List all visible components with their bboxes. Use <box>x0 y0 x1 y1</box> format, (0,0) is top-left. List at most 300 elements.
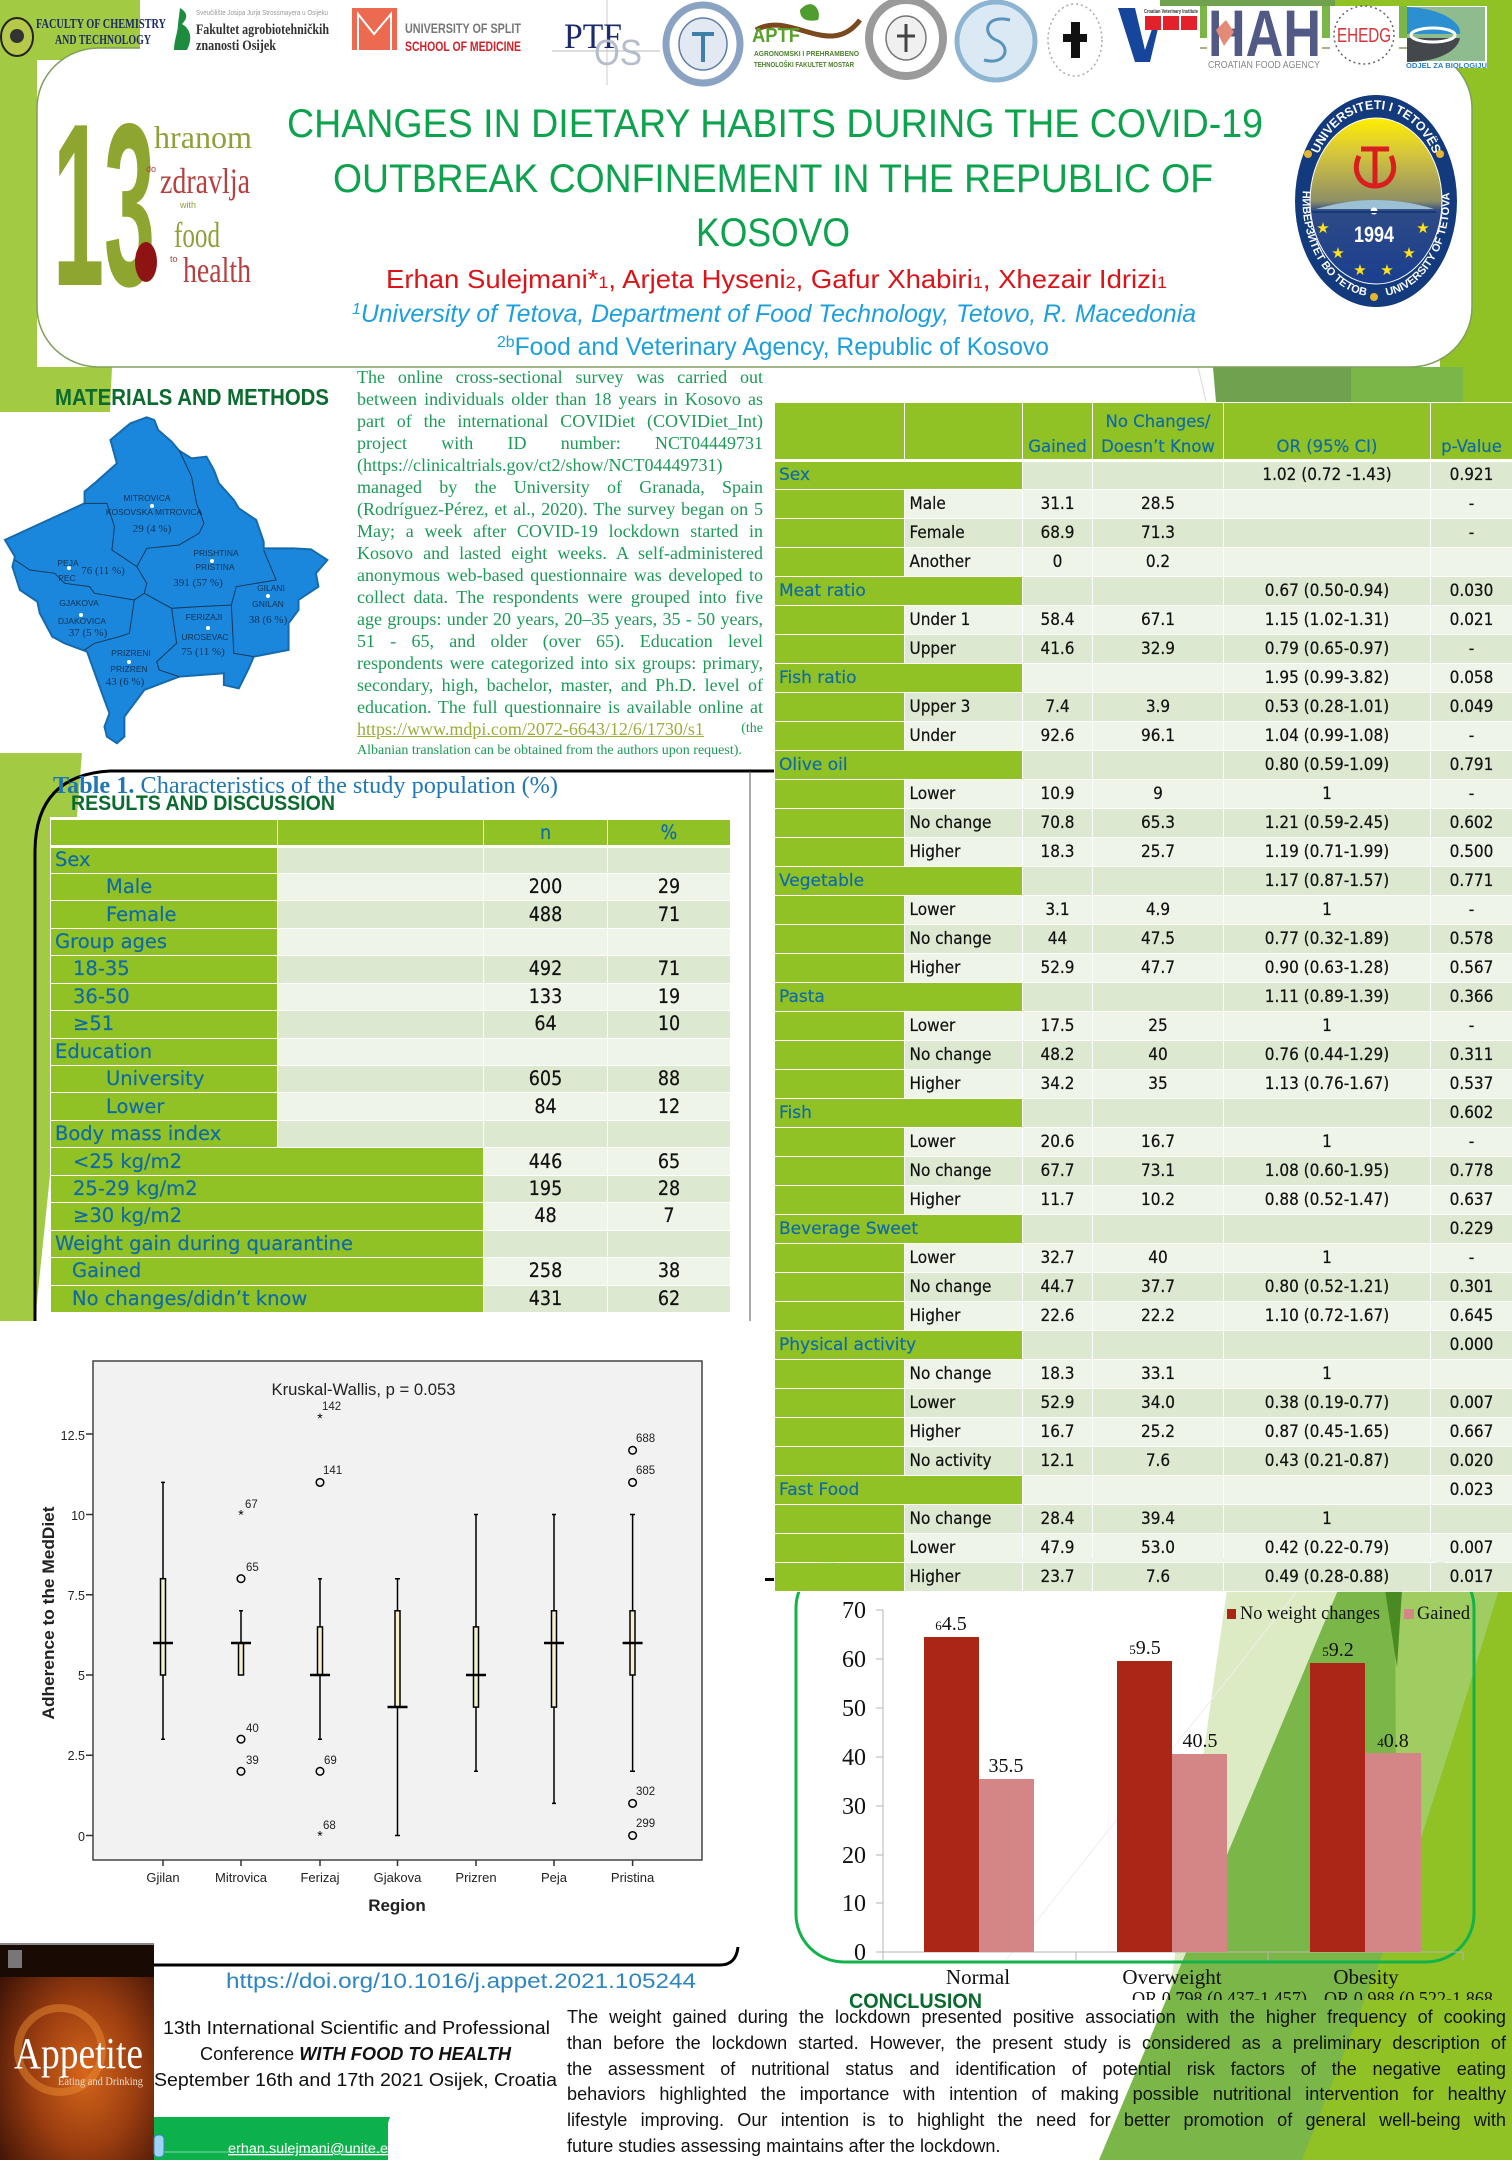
table 1: characteristics of the study population: 38 <box>658 1259 680 1282</box>
chart legend: No weight changes <box>1240 1603 1380 1624</box>
table 1: characteristics of the study population: ≥51 <box>73 1012 114 1035</box>
table 1 caption: Table 1. Characteristics of the study population (%) <box>53 773 558 799</box>
table 2: dietary habits by weight change: 18.3 <box>1040 1364 1075 1384</box>
table 2: dietary habits by weight change: 12.1 <box>1040 1451 1075 1471</box>
table 1: characteristics of the study population: 18-35 <box>73 957 130 980</box>
table 1: characteristics of the study population: 28 <box>658 1177 680 1200</box>
table 1: characteristics of the study population: 10 <box>658 1012 680 1035</box>
table 2: dietary habits by weight change: 23.7 <box>1040 1567 1075 1587</box>
logo: APTF: TEHNOLOŠKI FAKULTET MOSTAR <box>754 60 854 69</box>
title: OUTBREAK CONFINEMENT IN THE REPUBLIC OF <box>333 157 1213 201</box>
table 2: dietary habits by weight change: Higher <box>910 958 960 978</box>
logo: croatian veterinary institute: Croatian Veterinary Institute <box>1144 9 1198 15</box>
table 1: characteristics of the study population: Gained <box>72 1259 141 1282</box>
table 2: dietary habits by weight change: 73.1 <box>1141 1161 1175 1181</box>
table 2: dietary habits by weight change: Meat ratio <box>779 581 866 601</box>
box plot: adherence to the MedDiet by region: 299 <box>636 1818 655 1830</box>
table 2: dietary habits by weight change: - <box>1469 900 1474 920</box>
box plot: adherence to the MedDiet by region: Prizren <box>455 1870 497 1885</box>
table 2: dietary habits by weight change: Higher <box>910 1306 960 1326</box>
table 2: dietary habits by weight change: 67.7 <box>1040 1161 1075 1181</box>
table 2: dietary habits by weight change: 96.1 <box>1141 726 1175 746</box>
table 2: dietary habits by weight change: 1 <box>1322 1509 1332 1529</box>
table 2: dietary habits by weight change: 0.007 <box>1450 1538 1493 1558</box>
table 2: dietary habits by weight change: 52.9 <box>1040 958 1075 978</box>
table 1: characteristics of the study population: 19 <box>658 985 680 1008</box>
table 1: characteristics of the study population <box>51 820 730 1312</box>
table 2: dietary habits by weight change: Higher <box>910 1567 960 1587</box>
table 2: dietary habits by weight change: 0.500 <box>1450 842 1493 862</box>
table 2: dietary habits by weight change: 20.6 <box>1040 1132 1075 1152</box>
table 2: dietary habits by weight change: 47.5 <box>1141 929 1175 949</box>
bar chart: weight changes by BMI class: Overweight <box>1122 1965 1222 1989</box>
table 2: dietary habits by weight change: 58.4 <box>1040 610 1075 630</box>
header panel <box>37 0 1472 367</box>
table 2: dietary habits by weight change: - <box>1469 1248 1474 1268</box>
box plot: adherence to the MedDiet by region: * <box>238 1506 244 1522</box>
table 2: dietary habits by weight change: 39.4 <box>1141 1509 1175 1529</box>
bar chart: weight changes by BMI class: 40 <box>842 1745 866 1771</box>
conclusion text: behaviors highlighted the importance with intention of making possible nutritional intervention for healthy <box>567 2084 1506 2104</box>
table 2: dietary habits by weight change: 1.15 (1.02-1.31) <box>1265 610 1389 630</box>
logo: croatian food agency: CROATIAN FOOD AGENCY <box>1208 60 1320 71</box>
bar chart: weight changes by BMI class: 59.2 <box>1322 1639 1354 1661</box>
table 2: dietary habits by weight change: 0.43 (0.21-0.87) <box>1265 1451 1389 1471</box>
table 2: dietary habits by weight change: 7.6 <box>1146 1451 1170 1471</box>
table 2: dietary habits by weight change: 52.9 <box>1040 1393 1075 1413</box>
box plot: adherence to the MedDiet by region: Kruskal-Wallis, p = 0.053 <box>272 1380 456 1399</box>
box plot: adherence to the MedDiet by region: * <box>317 1828 323 1844</box>
table 2: dietary habits by weight change: 67.1 <box>1141 610 1175 630</box>
table 2: dietary habits by weight change: 1 <box>1322 1248 1332 1268</box>
table 2: dietary habits by weight change: 0.79 (0.65-0.97) <box>1265 639 1389 659</box>
logo: APTF <box>752 4 860 69</box>
materials and methods text: managed by the University of Granada, Spain <box>357 477 763 497</box>
table 2: dietary habits by weight change: 7.4 <box>1045 697 1070 717</box>
table 1: characteristics of the study population: 258 <box>529 1259 562 1282</box>
table 2: dietary habits by weight change: 31.1 <box>1040 494 1075 514</box>
map of Kosovo with regions: 29 (4 %) <box>133 523 172 535</box>
table 2: dietary habits by weight change: No change <box>910 1161 991 1181</box>
table 2: dietary habits by weight change: 32.9 <box>1141 639 1175 659</box>
materials and methods text: secondary, high, bachelor, master, and Ph.D. level of <box>357 675 763 695</box>
box plot: adherence to the MedDiet by region: Gjakova <box>374 1870 422 1885</box>
logo: croatian veterinary institute <box>1118 8 1198 62</box>
logo: university of tetova crest: UNIVERSITY OF TETOVA <box>1385 192 1450 296</box>
map of Kosovo with regions: GNILAN <box>252 599 284 609</box>
table 1: characteristics of the study population: 71 <box>658 957 680 980</box>
logo: university of tetova crest <box>1295 95 1457 307</box>
table 2: dietary habits by weight change: 35 <box>1148 1074 1168 1094</box>
affiliation 1: University of Tetova, Department of Food Technology, Tetovo, R. Macedonia <box>361 300 1196 328</box>
table 2: dietary habits by weight change: - <box>1469 784 1474 804</box>
logo: odjel za biologiju <box>1406 6 1487 70</box>
logo: fakultet agrobiotehnickih: Fakultet agrobiotehničkih <box>196 22 330 38</box>
table 2: dietary habits by weight change: 17.5 <box>1040 1016 1075 1036</box>
table 2: dietary habits by weight change: 0.80 (0.52-1.21) <box>1265 1277 1389 1297</box>
materials and methods text: May; a week after COVID-19 lockdown started in <box>357 521 763 541</box>
table 2: dietary habits by weight change: 37.7 <box>1141 1277 1175 1297</box>
table 1: characteristics of the study population: Male <box>106 875 152 898</box>
affiliation 2: 2b <box>497 334 515 351</box>
conclusion text: future studies assessing maintains after the lockdown. <box>567 2136 1000 2156</box>
table 2: dietary habits by weight change: 25.7 <box>1141 842 1175 862</box>
box plot: adherence to the MedDiet by region: 67 <box>245 1499 258 1511</box>
table 2: dietary habits by weight change: 0.645 <box>1450 1306 1493 1326</box>
table 2: dietary habits by weight change: Higher <box>910 1190 960 1210</box>
table 2: dietary habits by weight change: - <box>1469 639 1474 659</box>
table 2: dietary habits by weight change: 1 <box>1322 784 1332 804</box>
box plot: adherence to the MedDiet by region: 10 <box>71 1509 85 1523</box>
table 2: dietary habits by weight change: Under <box>910 726 956 746</box>
logo: 13 hranom do zdravlja with food to health: to <box>170 254 178 264</box>
table 2: dietary habits by weight change: Upper 3 <box>910 697 970 717</box>
logo: university of tetova crest: ★ <box>1380 262 1394 279</box>
materials and methods text: (the <box>741 721 763 736</box>
logo: university of split: UNIVERSITY OF SPLIT <box>405 20 521 36</box>
table 2: dietary habits by weight change: 22.2 <box>1141 1306 1175 1326</box>
table 2: dietary habits by weight change: 0.791 <box>1450 755 1493 775</box>
bar chart: weight changes by BMI class: 0 <box>854 1940 866 1966</box>
bar chart: weight changes by BMI class: 20 <box>842 1843 866 1869</box>
logo: university of tetova crest: ★ <box>1416 220 1430 237</box>
table 2: dietary habits by weight change: 1 <box>1322 1132 1332 1152</box>
logo: university of tetova crest: ★ <box>1353 262 1367 279</box>
bar chart: weight changes by BMI class: 40.8 <box>1377 1730 1409 1752</box>
box plot: adherence to the MedDiet by region: Ferizaj <box>300 1870 340 1885</box>
materials and methods text: between individuals older than 18 years in Kosovo as <box>357 389 763 409</box>
table 2: dietary habits by weight change: 0 <box>1053 552 1062 572</box>
logo: faculty of chemistry and technology: FACULTY OF CHEMISTRY <box>36 17 166 32</box>
table 1: characteristics of the study population: 488 <box>529 903 562 926</box>
journal cover: Appetite: Appetite <box>14 2029 143 2078</box>
logo: 13 hranom do zdravlja with food to health: food <box>174 215 220 255</box>
table 1: characteristics of the study population: 492 <box>529 957 562 980</box>
table 2: dietary habits by weight change: 1.02 (0.72 -1.43) <box>1262 465 1392 485</box>
table 2: dietary habits by weight change: 1 <box>1322 1364 1332 1384</box>
table 2: dietary habits by weight change: 3.9 <box>1146 697 1170 717</box>
table 2: dietary habits by weight change: No change <box>910 929 991 949</box>
table 1: characteristics of the study population: Group ages <box>55 930 167 953</box>
table 2: dietary habits by weight change: Higher <box>910 1074 960 1094</box>
table 2: dietary habits by weight change: 70.8 <box>1040 813 1075 833</box>
table 2: dietary habits by weight change: 28.4 <box>1040 1509 1075 1529</box>
box plot: adherence to the MedDiet by region: 68 <box>323 1820 336 1832</box>
box plot: adherence to the MedDiet by region: 685 <box>636 1465 655 1477</box>
table 2: dietary habits by weight change: 0.578 <box>1450 929 1493 949</box>
bar chart: weight changes by BMI class: 59.5 <box>1129 1637 1161 1659</box>
table 1: characteristics of the study population: Female <box>106 903 177 926</box>
table 2: dietary habits by weight change: 0.77 (0.32-1.89) <box>1265 929 1389 949</box>
mark beside right table <box>765 1578 774 1581</box>
bar chart: weight changes by BMI class: 10 <box>842 1891 866 1917</box>
map of Kosovo with regions: PEJA <box>57 558 79 568</box>
table 2: dietary habits by weight change: Pasta <box>779 987 825 1007</box>
logo: fakultet agrobiotehnickih <box>174 8 330 54</box>
table 2: dietary habits by weight change: Fast Food <box>779 1480 859 1500</box>
materials and methods text: The online cross-sectional survey was carried out <box>357 367 763 387</box>
table 2: dietary habits by weight change: - <box>1469 523 1474 543</box>
conclusion text: than before the lockdown started. However, the present study is considered as a preliminary description of <box>567 2033 1506 2053</box>
table 1: characteristics of the study population: Lower <box>106 1095 164 1118</box>
logo: PTF Osijek: OS <box>594 32 642 73</box>
table 2: dietary habits by weight change: 0.020 <box>1450 1451 1493 1471</box>
table 1: characteristics of the study population: University <box>106 1067 204 1090</box>
table 2: dietary habits by weight change: 0.602 <box>1450 813 1493 833</box>
bar chart: weight changes by BMI class: 64.5 <box>935 1613 967 1635</box>
bar chart: weight changes by BMI class: 50 <box>842 1696 866 1722</box>
bar chart: weight changes by BMI class: 35.5 <box>988 1755 1024 1777</box>
box plot: adherence to the MedDiet by region: 142 <box>322 1401 341 1413</box>
bar chart: weight changes by BMI class: OR 0.798 (0.437-1.457) <box>1132 1988 1307 2010</box>
map of Kosovo with regions: KOSOVSKA MITROVICA <box>106 507 203 517</box>
table 2: dietary habits by weight change: 0.017 <box>1450 1567 1493 1587</box>
table 1: characteristics of the study population: 62 <box>658 1287 680 1310</box>
table 2: dietary habits by weight change: - <box>1469 1132 1474 1152</box>
materials and methods text: (https://clinicaltrials.gov/ct2/show/NCT04449731) <box>357 455 722 475</box>
table 2: dietary habits by weight change: 0.87 (0.45-1.65) <box>1265 1422 1389 1442</box>
logo: APTF: AGRONOMSKI I PREHRAMBENO <box>754 51 860 58</box>
box plot: adherence to the MedDiet by region: 0 <box>78 1830 85 1844</box>
table 1: characteristics of the study population: 84 <box>534 1095 557 1118</box>
table 2: dietary habits by weight change: 0.537 <box>1450 1074 1493 1094</box>
table 2: dietary habits by weight change: 16.7 <box>1040 1422 1075 1442</box>
box plot: adherence to the MedDiet by region: Adherence to the MedDiet <box>39 1506 58 1720</box>
table 2: dietary habits by weight change: No Changes/ <box>1105 412 1210 430</box>
table 2: dietary habits by weight change: 25.2 <box>1141 1422 1175 1442</box>
table 2: dietary habits by weight change: No change <box>910 1509 991 1529</box>
table 2: dietary habits by weight change: 11.7 <box>1040 1190 1075 1210</box>
materials and methods text <box>357 367 763 758</box>
box plot: adherence to the MedDiet by region <box>39 1361 702 1915</box>
table 2: dietary habits by weight change: 0.000 <box>1450 1335 1493 1355</box>
table 2: dietary habits by weight change: 25 <box>1148 1016 1168 1036</box>
table 1: characteristics of the study population: No changes/didn’t know <box>72 1287 307 1310</box>
journal cover: Appetite <box>0 1943 154 2160</box>
logo: black cross seal <box>1048 4 1102 76</box>
map of Kosovo with regions: GJAKOVA <box>59 598 99 608</box>
table 2: dietary habits by weight change: 10.9 <box>1040 784 1075 804</box>
logo: university of split: SCHOOL OF MEDICINE <box>405 38 521 54</box>
box plot: adherence to the MedDiet by region: Peja <box>541 1870 568 1885</box>
box plot: adherence to the MedDiet by region: * <box>317 1410 323 1426</box>
chart legend: Gained <box>1417 1603 1470 1624</box>
table 1: characteristics of the study population: 431 <box>529 1287 562 1310</box>
materials and methods text: project with ID number: NCT04449731 <box>357 433 763 453</box>
table 2: dietary habits by weight change: Higher <box>910 1422 960 1442</box>
logo: 13 hranom do zdravlja with food to health: health <box>183 250 251 290</box>
logo: 13 hranom do zdravlja with food to health: hranom <box>154 119 252 155</box>
bar chart: weight changes by BMI class: OR 0.988 (0.522-1.868 <box>1324 1988 1493 2010</box>
box plot: adherence to the MedDiet by region: Pristina <box>611 1870 655 1885</box>
table 2: dietary habits by weight change: 3.1 <box>1045 900 1070 920</box>
table 2: dietary habits by weight change: 0.53 (0.28-1.01) <box>1265 697 1389 717</box>
box plot: adherence to the MedDiet by region: 2.5 <box>68 1749 85 1763</box>
logo: university of tetova crest: UNIVERSITETI I TETOVËS <box>1310 100 1440 153</box>
table 1: characteristics of the study population: 65 <box>658 1150 680 1173</box>
table 2: dietary habits by weight change: 0.67 (0.50-0.94) <box>1265 581 1389 601</box>
table 2: dietary habits by weight change: 65.3 <box>1141 813 1175 833</box>
table 1: characteristics of the study population: 48 <box>534 1204 557 1227</box>
table 2: dietary habits by weight change: 44.7 <box>1040 1277 1075 1297</box>
table 1: characteristics of the study population: 195 <box>529 1177 562 1200</box>
table 1: characteristics of the study population: Education <box>55 1040 152 1063</box>
table 2: dietary habits by weight change: 1.08 (0.60-1.95) <box>1265 1161 1389 1181</box>
table 2: dietary habits by weight change: 48.2 <box>1040 1045 1075 1065</box>
title: KOSOVO <box>696 211 850 255</box>
map of Kosovo with regions: MITROVICA <box>123 493 171 503</box>
heading: materials and methods: MATERIALS AND METHODS <box>55 384 329 410</box>
logo: university of tetova crest: ★ <box>1316 220 1330 237</box>
table 2: dietary habits by weight change: 1.95 (0.99-3.82) <box>1265 668 1389 688</box>
table 2: dietary habits by weight change: 0.771 <box>1450 871 1493 891</box>
materials and methods text: 51 - 65, and older (over 65). Education level <box>357 631 763 651</box>
logo: APTF: APTF <box>752 25 800 47</box>
affiliation 1: 1 <box>352 301 361 318</box>
box plot: adherence to the MedDiet by region: 12.5 <box>61 1429 85 1443</box>
table 2: dietary habits by weight change: 0.80 (0.59-1.09) <box>1265 755 1389 775</box>
bar chart: weight changes by BMI class <box>796 1560 1493 2010</box>
materials and methods text: age groups: under 20 years, 20–35 years, 35 - 50 years, <box>357 609 763 629</box>
table 2: dietary habits by weight change: 0.2 <box>1146 552 1170 572</box>
conclusion text: the assessment of nutritional status and identification of potential risk factors of the negative eating <box>567 2059 1506 2079</box>
map of Kosovo with regions: PRIZRENI <box>111 648 151 658</box>
contact button with email <box>154 2117 390 2160</box>
title <box>287 102 1263 255</box>
bar chart: weight changes by BMI class: 70 <box>842 1598 866 1624</box>
table 2: dietary habits by weight change: Lower <box>910 784 955 804</box>
logo: faculty of chemistry and technology: AND TECHNOLOGY <box>55 33 151 48</box>
table 2: dietary habits by weight change: 18.3 <box>1040 842 1075 862</box>
materials and methods text: respondents were categorized into six groups: primary, <box>357 653 763 673</box>
table 2: dietary habits by weight change: 7.6 <box>1146 1567 1170 1587</box>
table 1: characteristics of the study population: Sex <box>55 848 91 871</box>
table 2: dietary habits by weight change: 1 <box>1322 900 1332 920</box>
contact button with email: erhan.sulejmani@unite.e <box>228 2141 388 2156</box>
logo: 13 hranom do zdravlja with food to health: with <box>179 200 196 210</box>
doi link: https://doi.org/10.1016/j.appet.2021.105244 <box>226 1970 696 1993</box>
table 2: dietary habits by weight change: 47.9 <box>1040 1538 1075 1558</box>
materials and methods text: Kosovo and lasted eight weeks. A self-administered <box>357 543 763 563</box>
table 2: dietary habits by weight change: 0.88 (0.52-1.47) <box>1265 1190 1389 1210</box>
materials and methods text: anonymous web-based questionnaire was developed to <box>357 565 763 585</box>
table 2: dietary habits by weight change: Under 1 <box>910 610 970 630</box>
map of Kosovo with regions: FERIZAJI <box>186 612 222 622</box>
logo row <box>1 0 1487 85</box>
table 2: dietary habits by weight change: OR (95% CI) <box>1277 436 1377 456</box>
table 1: characteristics of the study population: 12 <box>658 1095 680 1118</box>
authors: Erhan Sulejmani* 1, Arjeta Hyseni 2, Gafur Xhabiri 1, Xhezair Idrizi 1 <box>386 264 1167 294</box>
table 2: dietary habits by weight change: 1.04 (0.99-1.08) <box>1265 726 1389 746</box>
table 2: dietary habits by weight change: No change <box>910 1045 991 1065</box>
box plot: adherence to the MedDiet by region: 40 <box>246 1723 259 1735</box>
table 2: dietary habits by weight change: 0.921 <box>1450 465 1493 485</box>
table 2: dietary habits by weight change: Beverage Sweet <box>779 1219 918 1239</box>
table 1: characteristics of the study population: 605 <box>529 1067 562 1090</box>
table 2: dietary habits by weight change: 0.023 <box>1450 1480 1493 1500</box>
logo: EHEDG: EHEDG <box>1337 25 1391 47</box>
conclusion text: lifestyle improving. Our intention is to highlight the need for better promotion of general well-being with <box>567 2110 1506 2130</box>
heading: results and discussion: RESULTS AND DISCUSSION <box>71 792 335 815</box>
box plot: adherence to the MedDiet by region: 69 <box>324 1755 337 1767</box>
table 2: dietary habits by weight change: 0.049 <box>1450 697 1493 717</box>
map of Kosovo with regions: PRIZREN <box>110 664 148 674</box>
logo: round seal grey <box>869 0 943 76</box>
table 2: dietary habits by weight change: 1.13 (0.76-1.67) <box>1265 1074 1389 1094</box>
table 2: dietary habits by weight change: 1 <box>1322 1016 1332 1036</box>
table 1: characteristics of the study population: 7 <box>663 1204 675 1227</box>
logo: PTF Osijek: PTF <box>564 16 622 56</box>
conference info <box>154 2018 558 2090</box>
table 1: characteristics of the study population: 36-50 <box>73 985 130 1008</box>
map of Kosovo with regions: GILANI <box>257 583 285 593</box>
table 2: dietary habits by weight change: 32.7 <box>1040 1248 1075 1268</box>
logo: university of tetova crest: ★ <box>1402 245 1416 262</box>
map of Kosovo with regions: 38 (6 %) <box>249 614 288 626</box>
table 2: dietary habits by weight change: Gained <box>1028 436 1087 456</box>
conclusion text: The weight gained during the lockdown presented positive association with the higher frequency of cooking <box>567 2007 1506 2027</box>
table 2: dietary habits by weight change: Vegetable <box>779 871 864 891</box>
table 2: dietary habits by weight change: 53.0 <box>1141 1538 1175 1558</box>
table 2: dietary habits by weight change: 0.38 (0.19-0.77) <box>1265 1393 1389 1413</box>
table 2: dietary habits by weight change: Male <box>910 494 946 514</box>
frame: results section curve <box>35 771 774 1321</box>
logo: university of split <box>352 8 521 54</box>
table 2: dietary habits by weight change: 28.5 <box>1141 494 1175 514</box>
map of Kosovo with regions: PEC <box>58 573 76 583</box>
box plot: adherence to the MedDiet by region: 7.5 <box>68 1589 85 1603</box>
table 2: dietary habits by weight change: Lower <box>910 1132 955 1152</box>
box plot: adherence to the MedDiet by region: Region <box>368 1896 426 1915</box>
table 2: dietary habits by weight change: 10.2 <box>1141 1190 1175 1210</box>
table 2: dietary habits by weight change: 0.90 (0.63-1.28) <box>1265 958 1389 978</box>
table 2: dietary habits by weight change: 0.021 <box>1450 610 1493 630</box>
logo: 13 hranom do zdravlja with food to health: do <box>146 164 156 174</box>
table 1: characteristics of the study population: 446 <box>529 1150 562 1173</box>
table 2: dietary habits by weight change: 0.76 (0.44-1.29) <box>1265 1045 1389 1065</box>
table 2: dietary habits by weight change: 0.637 <box>1450 1190 1493 1210</box>
logo: odjel za biologiju: ODJEL ZA BIOLOGIJU <box>1406 63 1487 70</box>
bar chart: weight changes by BMI class: 40.5 <box>1182 1730 1218 1752</box>
box plot: adherence to the MedDiet by region: 65 <box>246 1562 259 1574</box>
map of Kosovo with regions: PRISHTINA <box>193 548 239 558</box>
table 2: dietary habits by weight change: 0.778 <box>1450 1161 1493 1181</box>
map of Kosovo with regions: PRISTINA <box>195 562 235 572</box>
logo: round seal light blue <box>957 2 1035 80</box>
box plot: adherence to the MedDiet by region: 5 <box>78 1669 85 1683</box>
logo: university of tetova crest: ★ <box>1331 245 1345 262</box>
materials and methods text: https://www.mdpi.com/2072-6643/12/6/1730/s1 <box>357 719 704 739</box>
map of Kosovo with regions: UROSEVAC <box>181 632 229 642</box>
map of Kosovo with regions: 37 (5 %) <box>69 627 108 639</box>
logo: 13 hranom do zdravlja with food to health: 13 <box>53 76 155 335</box>
table 2: dietary habits by weight change: 1.21 (0.59-2.45) <box>1265 813 1389 833</box>
table 2: dietary habits by weight change: 9 <box>1153 784 1163 804</box>
table 1: characteristics of the study population: Body mass index <box>55 1122 221 1145</box>
logo: EHEDG <box>1330 6 1399 68</box>
box plot: adherence to the MedDiet by region: 39 <box>246 1755 259 1767</box>
logo: PTF Osijek <box>552 0 660 85</box>
table 2: dietary habits by weight change: 0.49 (0.28-0.88) <box>1265 1567 1389 1587</box>
table 2: dietary habits by weight change <box>775 403 1512 1592</box>
table 2: dietary habits by weight change: 34.0 <box>1141 1393 1175 1413</box>
table 1: characteristics of the study population: <25 kg/m2 <box>73 1150 182 1173</box>
logo: faculty of chemistry and technology <box>1 17 166 56</box>
table 2: dietary habits by weight change: 40 <box>1148 1045 1168 1065</box>
table 2: dietary habits by weight change: No change <box>910 1277 991 1297</box>
bar chart: weight changes by BMI class: Obesity <box>1333 1965 1399 1989</box>
table 1: characteristics of the study population: ≥30 kg/m2 <box>73 1204 182 1227</box>
